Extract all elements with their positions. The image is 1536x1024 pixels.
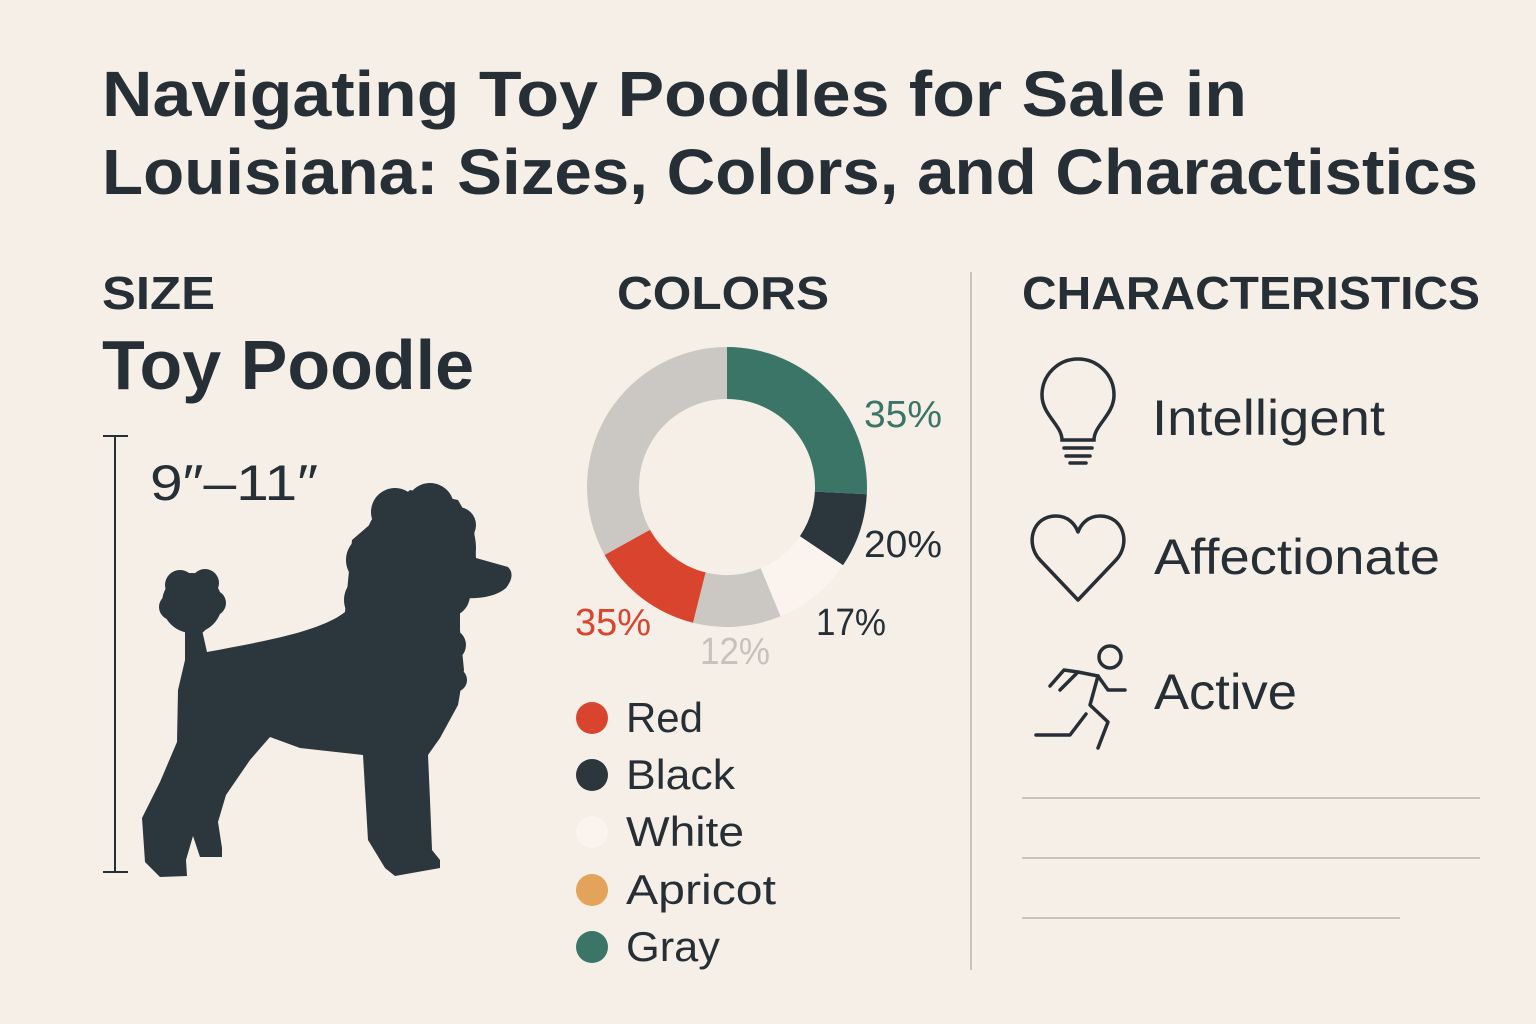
height measurement <box>103 436 128 872</box>
panel: colors <box>575 267 942 970</box>
title <box>102 58 1478 208</box>
legend <box>576 694 776 970</box>
title: Louisiana: Sizes, Colors, and Charactistics <box>102 136 1478 208</box>
title: Navigating Toy Poodles for Sale in <box>102 58 1247 130</box>
text: intelligent: Intelligent <box>1152 390 1385 446</box>
chart labels: 17% <box>816 602 886 644</box>
chart labels: 35% <box>575 602 651 644</box>
height label: 9″–11″ <box>150 455 318 511</box>
text: affectionate: Affectionate <box>1154 529 1440 585</box>
icon: lightbulb <box>1042 359 1114 463</box>
legend: Apricot <box>626 866 776 913</box>
legend: Gray <box>626 923 720 970</box>
heading: size: SIZE <box>102 267 215 319</box>
chart labels <box>575 394 942 673</box>
note lines <box>1022 798 1480 918</box>
heading: colors: COLORS <box>617 267 829 319</box>
panel: characteristics <box>1022 267 1480 918</box>
legend: Black <box>626 751 736 798</box>
chart labels: 35% <box>864 394 942 436</box>
heading: characteristics: CHARACTERISTICS <box>1022 267 1480 319</box>
text: active: Active <box>1154 664 1297 720</box>
icon: heart <box>1032 516 1124 600</box>
subheading: toy poodle: Toy Poodle <box>102 326 474 404</box>
icon: runner <box>1036 646 1125 748</box>
legend: Red <box>626 694 703 741</box>
panel: size <box>102 267 512 877</box>
icon: poodle silhouette <box>142 483 512 877</box>
chart labels: 20% <box>864 524 942 566</box>
legend: White <box>626 808 744 855</box>
chart labels: 12% <box>700 631 770 673</box>
donut chart <box>587 347 867 627</box>
